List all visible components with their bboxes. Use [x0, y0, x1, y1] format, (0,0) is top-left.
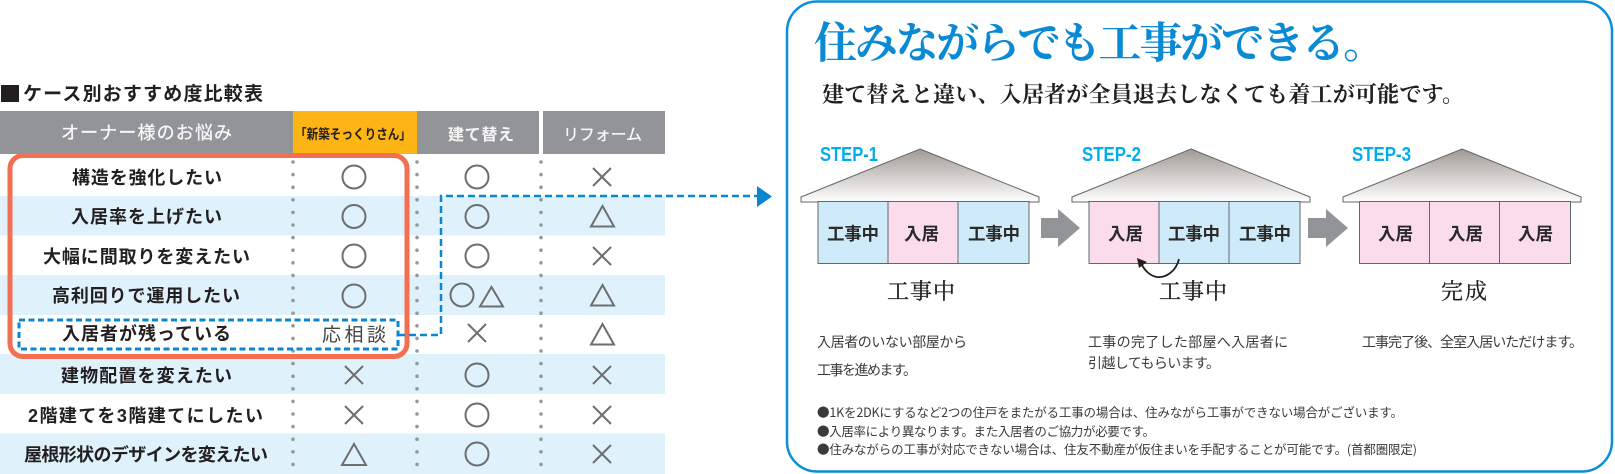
- step 3 description: 工事完了後、全室入居いただけます。: [1362, 334, 1583, 350]
- arrow: step 1 to step 2: [1041, 209, 1080, 247]
- row labels: 2階建てを3階建てにしたい: [28, 406, 263, 426]
- house 1: [801, 149, 1039, 264]
- row labels: [24, 168, 268, 465]
- column: 建て替え ratings: [450, 166, 503, 466]
- step 1 description: [817, 334, 967, 378]
- table header row: [0, 111, 665, 154]
- footnotes: [817, 402, 1417, 458]
- row labels: 建物配置を変えたい: [61, 366, 232, 386]
- footnotes: ●入居率により異なります。また入居者のご協力が必要です。: [817, 421, 1155, 440]
- step 1 description: 入居者のいない部屋から: [817, 334, 967, 350]
- row labels: 構造を強化したい: [72, 168, 222, 188]
- table header row: リフォーム: [563, 127, 642, 144]
- panel subtitle: 建て替えと違い、入居者が全員退去しなくても着工が可能です。: [822, 82, 1464, 107]
- table heading: ケース別おすすめ度比較表: [23, 83, 263, 105]
- column: リフォーム ratings: [591, 168, 614, 463]
- footnotes: ●住みながらの工事が対応できない場合は、住友不動産が仮住まいを手配することが可能です。(首都圏限定): [817, 439, 1417, 458]
- house 3: 入居: [1448, 224, 1483, 244]
- row labels: 大幅に間取りを変えたい: [43, 247, 250, 267]
- column: 新築そっくりさん ratings: [342, 166, 366, 465]
- arrow: step 2 to step 3: [1308, 209, 1348, 247]
- house 2: [1072, 149, 1310, 264]
- house 3: 入居: [1518, 224, 1553, 244]
- step 2 label: STEP-2: [1082, 144, 1141, 166]
- panel title: 住みながらでも工事ができる。: [814, 20, 1386, 68]
- step 1 caption: 工事中: [887, 279, 955, 304]
- step 1: [801, 144, 1039, 378]
- step 3: [1343, 144, 1583, 350]
- house 2: 入居: [1108, 224, 1143, 244]
- table header row: オーナー様のお悩み: [61, 123, 232, 143]
- step 1 description: 工事を進めます。: [817, 362, 917, 378]
- row labels: 入居率を上げたい: [71, 207, 222, 227]
- step 1 label: STEP-1: [820, 144, 878, 166]
- orange highlight frame: [10, 156, 407, 356]
- house 1: 工事中: [827, 224, 879, 244]
- step 2 description: [1088, 334, 1288, 371]
- panel: construction while occupied: [787, 2, 1612, 472]
- row labels: 入居者が残っている: [62, 323, 231, 344]
- curved move arrow: [1137, 258, 1179, 277]
- comparison table: [0, 111, 665, 474]
- footnotes: ●1Kを2DKにするなど2つの住戸をまたがる工事の場合は、住みながら工事ができない場合がございます。: [817, 402, 1403, 421]
- step 2 description: 工事の完了した部屋へ入居者に: [1088, 334, 1288, 350]
- alternating row backgrounds: [0, 196, 665, 474]
- step 3 caption: 完成: [1441, 279, 1487, 304]
- house 3: 入居: [1378, 224, 1413, 244]
- house 3: [1343, 149, 1581, 264]
- dashed connector arrow: [398, 186, 772, 335]
- house 1: 工事中: [968, 224, 1020, 244]
- house 1: 入居: [904, 224, 939, 244]
- step 2 description: 引越してもらいます。: [1088, 355, 1220, 371]
- house 2: 工事中: [1239, 224, 1291, 244]
- table header row: 建て替え: [448, 126, 514, 144]
- row labels: 高利回りで運用したい: [52, 286, 240, 306]
- 応相談 label: 応相談: [322, 324, 386, 346]
- step 2 caption: 工事中: [1159, 279, 1227, 304]
- house 2: 工事中: [1168, 224, 1220, 244]
- table header row: 「新築そっくりさん」: [295, 126, 411, 142]
- step 2: [1072, 144, 1310, 371]
- blue dashed highlight row: [19, 320, 398, 349]
- row labels: 屋根形状のデザインを変えたい: [24, 444, 268, 465]
- step 3 label: STEP-3: [1352, 144, 1411, 166]
